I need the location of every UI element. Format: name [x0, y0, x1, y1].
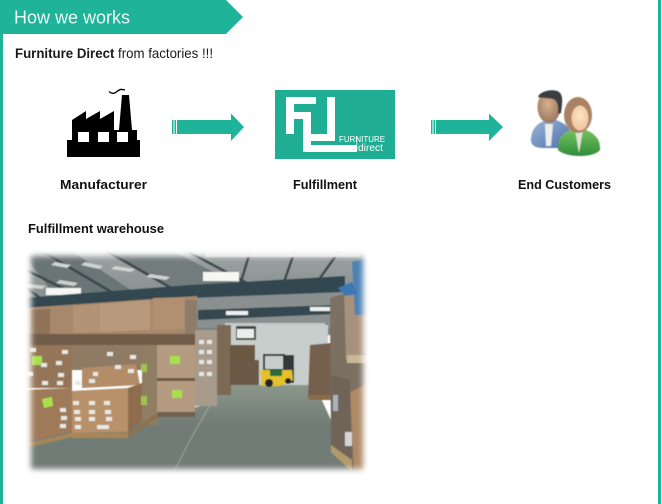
forklift [254, 354, 294, 388]
title banner [0, 0, 243, 34]
title banner: How we works [14, 8, 130, 28]
logo: Furniture Direct: direct [358, 143, 383, 154]
icon: customers [531, 90, 600, 156]
logo: Furniture Direct: FURNITURE [339, 135, 385, 144]
green stickers [32, 356, 182, 408]
man [531, 90, 571, 148]
ceiling [20, 245, 375, 335]
page border: right bar [658, 0, 661, 504]
main beam [22, 276, 345, 310]
pallets mid left [22, 325, 255, 425]
logo: Furniture Direct [275, 90, 395, 159]
page border: left bar [0, 30, 3, 504]
icon: factory [67, 89, 140, 157]
pallets upper left [22, 296, 200, 350]
arrow: fulfillment to end customers [431, 114, 503, 141]
photo: warehouse interior [20, 245, 375, 478]
subtitle: Furniture Direct from factories !!! [15, 45, 213, 61]
heading: Fulfillment warehouse: Fulfillment warehouse [28, 221, 164, 236]
floor [22, 385, 370, 478]
pallet labels [27, 340, 212, 429]
right pallet stacks [308, 258, 368, 472]
woman [558, 97, 600, 156]
arrow: manufacturer to fulfillment [172, 114, 244, 141]
second beam and far ceiling [197, 304, 331, 328]
label: Fulfillment: Fulfillment [293, 177, 358, 192]
label: Manufacturer: Manufacturer [60, 177, 147, 192]
pallets front [22, 364, 158, 449]
back wall [228, 325, 328, 390]
label: End Customers: End Customers [518, 177, 611, 192]
